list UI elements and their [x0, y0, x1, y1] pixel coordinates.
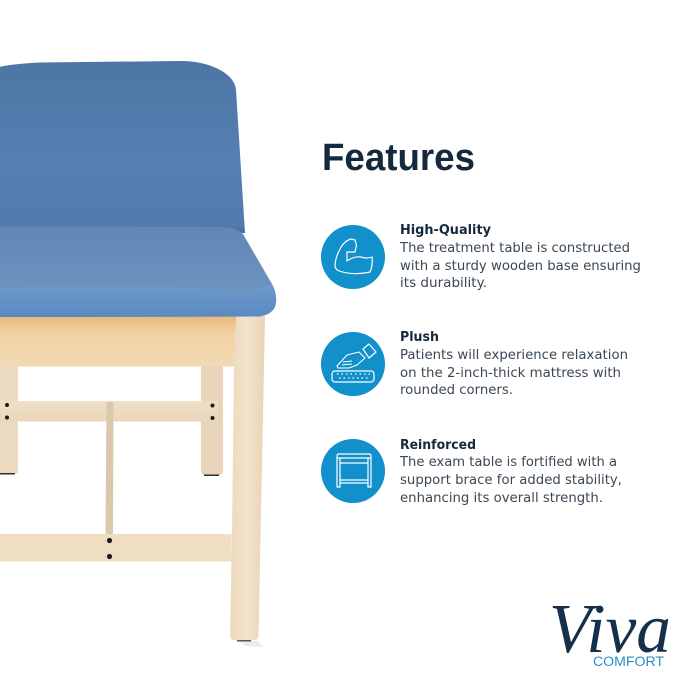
- logo subtitle: COMFORT: COMFORT: [593, 654, 664, 669]
- vertical support brace: [106, 402, 114, 534]
- feature: Reinforced: [321, 438, 622, 506]
- feature heading: Reinforced: [400, 438, 476, 453]
- icon: flexed arm: [321, 225, 385, 289]
- feature heading: High-Quality: [400, 223, 492, 238]
- back right leg: [201, 366, 223, 476]
- seat cushion: [0, 226, 276, 317]
- lower cross rail: [0, 534, 232, 562]
- feature description: enhancing its overall strength.: [400, 491, 603, 506]
- backrest cushion: [0, 61, 245, 233]
- feature description: rounded corners.: [400, 383, 513, 398]
- feature heading: Plush: [400, 330, 439, 345]
- feature description: The exam table is fortified with a: [399, 455, 617, 470]
- feature description: its durability.: [400, 276, 487, 291]
- feature description: The treatment table is constructed: [399, 241, 630, 256]
- logo: Viva Comfort: [549, 591, 671, 669]
- icon: exam table: [321, 439, 385, 503]
- feature description: on the 2-inch-thick mattress with: [400, 366, 621, 381]
- feature description: [400, 348, 628, 398]
- upper cross rail: [0, 401, 218, 422]
- feature description: [399, 455, 622, 506]
- feature description: support brace for added stability,: [400, 473, 622, 488]
- product photo: treatment table: [0, 61, 276, 647]
- feature description: Patients will experience relaxation: [400, 348, 628, 363]
- icon: hand on mattress: [321, 332, 385, 396]
- feature: High-Quality: [321, 223, 641, 291]
- bolts: [5, 403, 214, 559]
- feature: Plush: [321, 330, 628, 398]
- seat front edge: [0, 284, 276, 317]
- logo wordmark: Viva script: Viva: [549, 591, 671, 668]
- feature description: with a sturdy wooden base ensuring: [400, 259, 641, 274]
- back left leg: [0, 366, 18, 474]
- wooden apron: [0, 316, 236, 366]
- feature description: [399, 241, 641, 291]
- heading: Features: Features: [322, 137, 475, 179]
- front leg: [230, 316, 265, 642]
- floor shadow: [238, 641, 264, 647]
